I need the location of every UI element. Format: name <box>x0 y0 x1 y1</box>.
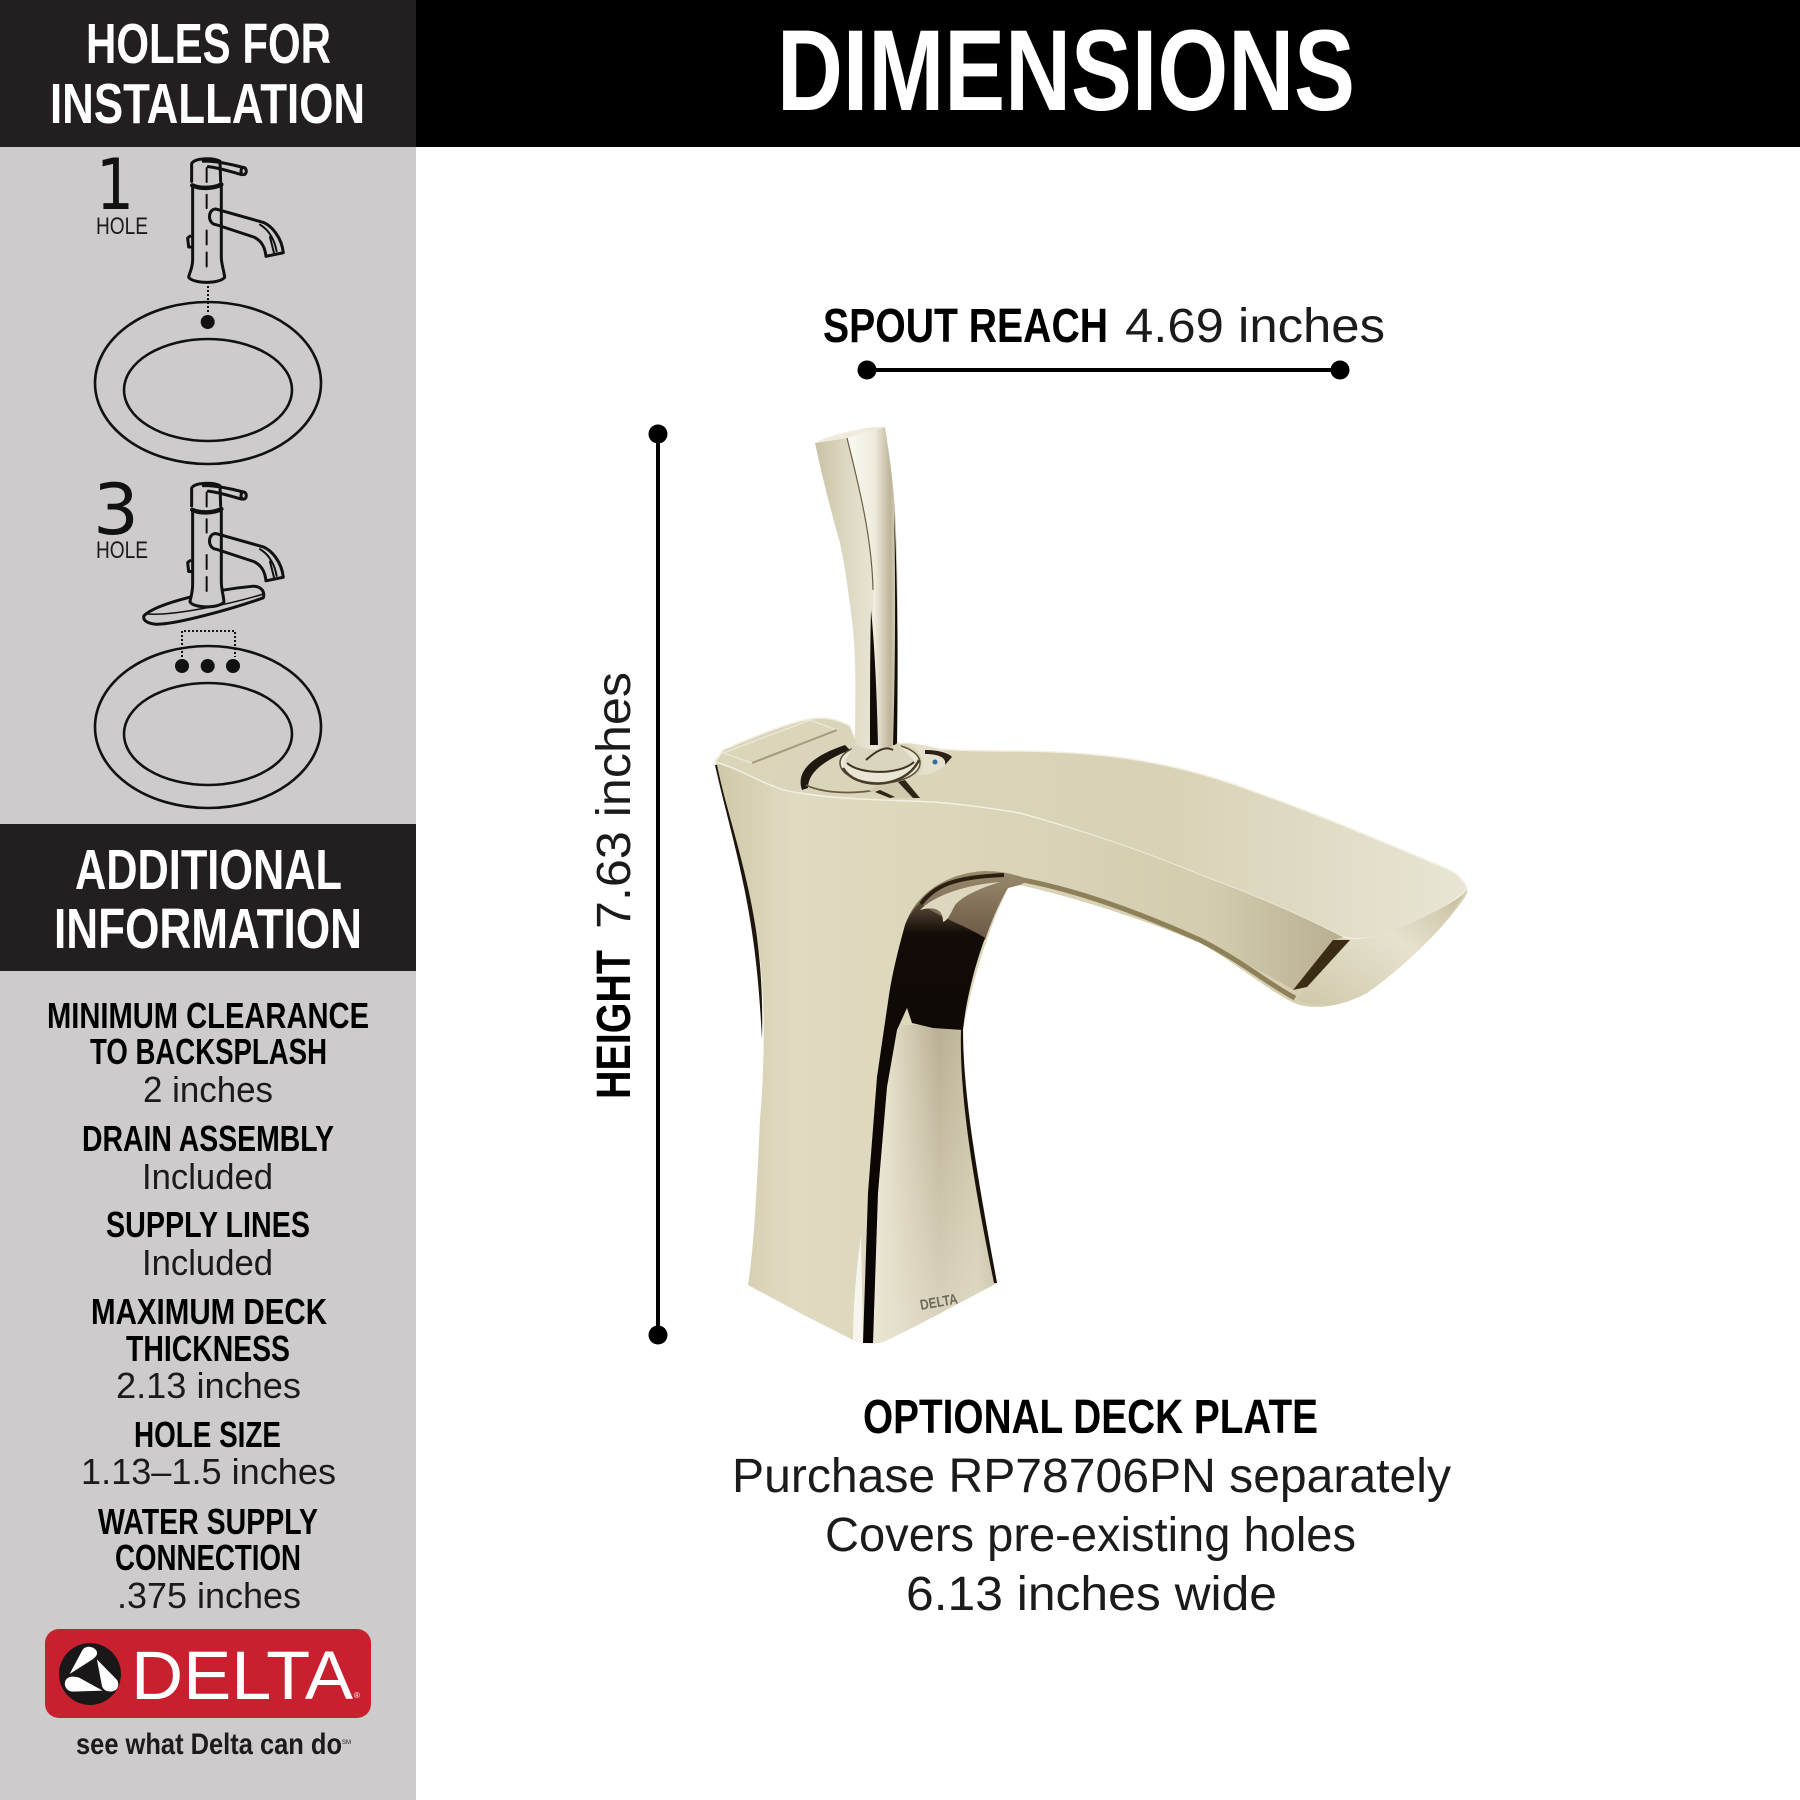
spout top face <box>715 718 1467 939</box>
leg right edge <box>961 1030 997 1283</box>
spout mouth <box>1297 895 1463 1004</box>
spout lower lip <box>1005 877 1295 998</box>
text block: optional deck plate: OPTIONAL DECK PLATE <box>863 1391 1318 1444</box>
title: dimensions banner: DIMENSIONS <box>777 7 1355 135</box>
arrow: height dimension line <box>648 424 668 1344</box>
spout side face <box>1020 814 1343 990</box>
icon: three hole installation: 3 <box>93 469 139 551</box>
handle reflections <box>870 510 898 745</box>
text block: specifications list: WATER SUPPLY <box>98 1501 318 1542</box>
faucet inner leg <box>868 1025 997 1343</box>
stem under collar <box>868 775 920 798</box>
text block: specifications list <box>47 995 369 1616</box>
text block: specifications list: CONNECTION <box>115 1537 301 1578</box>
icon: three hole installation <box>93 469 321 808</box>
icon: one hole installation <box>95 144 321 464</box>
handle left face <box>815 438 874 751</box>
text block: specifications list: DRAIN ASSEMBLY <box>82 1118 334 1159</box>
text block: specifications list: Included <box>142 1242 273 1283</box>
handle recess rim <box>806 760 920 792</box>
text block: optional deck plate: 6.13 inches wide <box>906 1568 1277 1621</box>
icon: delta logo <box>45 1629 371 1761</box>
text block: optional deck plate <box>732 1391 1451 1621</box>
heading: height: 7.63 inches <box>588 672 641 929</box>
collar stem flare <box>845 742 915 772</box>
text block: specifications list: .375 inches <box>117 1575 301 1616</box>
text block: specifications list: SUPPLY LINES <box>106 1204 310 1245</box>
handle top facet <box>815 427 885 443</box>
icon: one hole installation: HOLE <box>96 213 148 240</box>
panel: holes for installation header: INSTALLATION <box>50 72 365 136</box>
collar <box>840 743 920 783</box>
text block: specifications list: HOLE SIZE <box>134 1414 281 1455</box>
heading: spout reach: SPOUT REACH <box>823 300 1108 353</box>
panel: holes for installation header: HOLES FOR <box>86 12 331 76</box>
faucet body <box>715 718 1467 1343</box>
text block: specifications list: TO BACKSPLASH <box>90 1031 327 1072</box>
icon: delta logo: ® <box>354 1691 360 1700</box>
faucet left edge shading <box>715 765 762 1040</box>
illustration: faucet <box>715 427 1467 1343</box>
text block: specifications list: THICKNESS <box>126 1328 290 1369</box>
deck cover plate <box>723 720 837 763</box>
text block: optional deck plate: Purchase RP78706PN separately <box>732 1450 1451 1503</box>
right recess <box>907 743 952 775</box>
faucet inner leg fade <box>868 1025 997 1343</box>
icon: delta logo: DELTA <box>131 1637 353 1714</box>
text block: specifications list: 2 inches <box>143 1069 273 1110</box>
title: dimensions banner <box>416 0 1800 147</box>
text block: optional deck plate: Covers pre-existing holes <box>825 1509 1356 1562</box>
panel: additional information header: INFORMATION <box>54 897 362 961</box>
text block: specifications list: 1.13–1.5 inches <box>81 1451 336 1492</box>
arch highlights <box>921 875 1004 904</box>
panel: sidebar background <box>0 0 416 1800</box>
heading: height: HEIGHT <box>588 950 641 1099</box>
icon: three hole installation: HOLE <box>96 537 148 564</box>
blue dot <box>932 760 938 764</box>
icon: one hole installation: 1 <box>96 144 134 226</box>
heading: spout reach: 4.69 inches <box>1125 300 1385 353</box>
text block: specifications list: MAXIMUM DECK <box>91 1291 327 1332</box>
spout dark strip <box>1293 940 1350 990</box>
arrow: spout reach dimension line <box>858 360 1350 380</box>
heading: spout reach <box>823 300 1385 353</box>
text block: specifications list: 2.13 inches <box>116 1365 301 1406</box>
leg left highlight <box>853 1235 863 1343</box>
panel: holes for installation header <box>0 0 416 147</box>
icon: delta logo: see what Delta can do <box>76 1728 342 1761</box>
panel: additional information header <box>0 824 416 971</box>
faucet logo: DELTA <box>919 1292 960 1314</box>
text block: specifications list: MINIMUM CLEARANCE <box>47 995 369 1036</box>
handle recess <box>801 745 850 790</box>
heading: height <box>588 672 641 1099</box>
arch reflection <box>905 871 1030 940</box>
handle right face <box>847 427 898 752</box>
panel: additional information header: ADDITIONAL <box>75 838 342 902</box>
text block: specifications list: Included <box>142 1156 273 1197</box>
faucet dark reflection <box>863 903 985 1343</box>
icon: delta logo: SM <box>342 1740 351 1746</box>
